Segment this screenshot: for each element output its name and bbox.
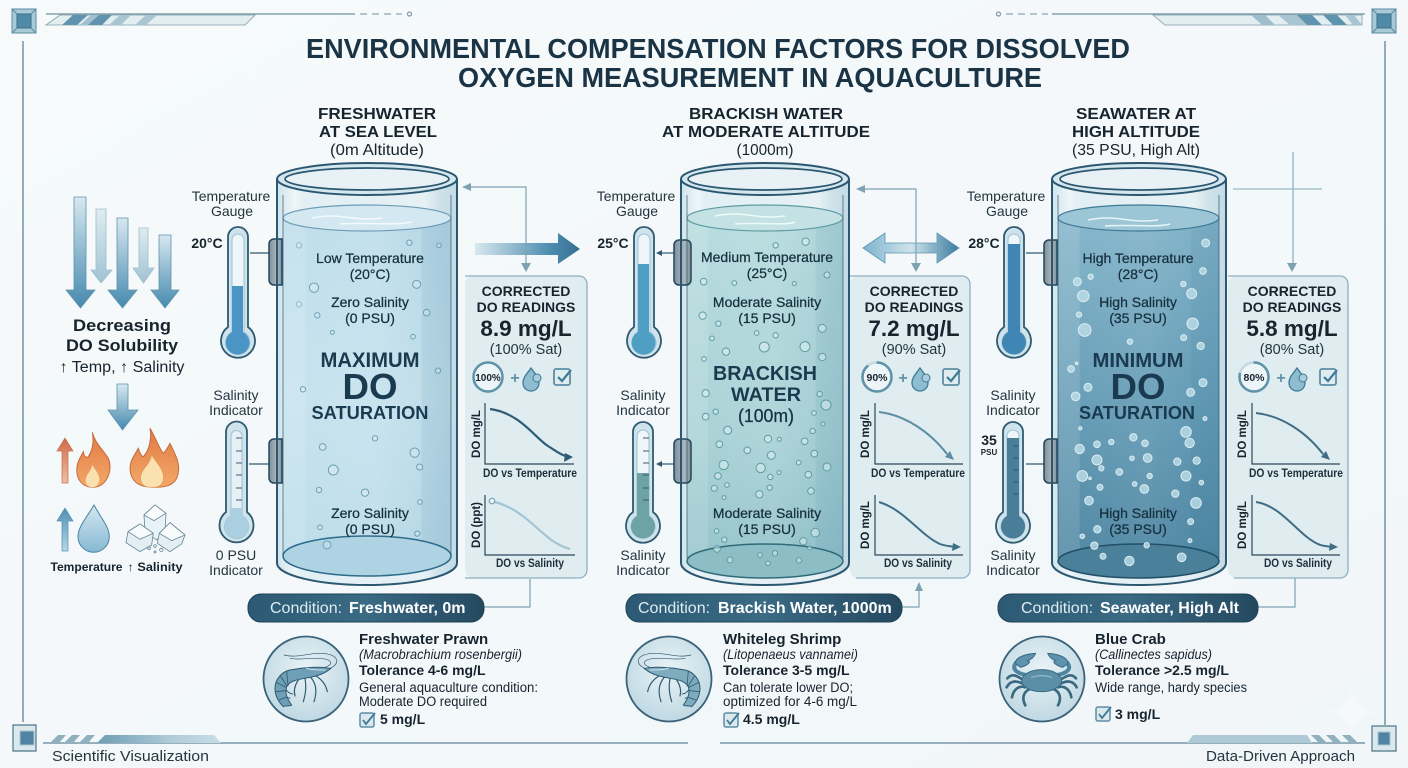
text: temperature and salinity labels: Temperature [50, 560, 123, 574]
heading: brackish column: (1000m) [736, 142, 794, 159]
tank text: (35 PSU) [1109, 521, 1167, 537]
value: 35 PSU: PSU [981, 448, 997, 457]
connector: pill 3 to panel 3 [1258, 578, 1295, 607]
heading: freshwater column: FRESHWATER [318, 106, 436, 123]
bubbles [296, 240, 441, 549]
text: decreasing DO solubility [60, 316, 185, 376]
species text: freshwater prawn: Tolerance 4-6 mg/L [359, 662, 486, 678]
icon: decreasing arrows [66, 197, 179, 308]
title [306, 33, 1130, 93]
chart: DO vs salinity: DO (ppt) [471, 502, 483, 548]
chart: DO vs salinity: DO vs Salinity [884, 558, 953, 570]
icon: saturation ring [474, 362, 502, 392]
icon: blue up arrow [57, 508, 73, 551]
value: 7.2 mg/L [868, 316, 960, 341]
connector: pill 1 to panel 1 [484, 579, 530, 607]
glass body [277, 179, 457, 585]
chart: DO vs salinity [860, 495, 963, 570]
plus sign: + [898, 370, 908, 387]
condition pill: freshwater: Freshwater, 0m [349, 600, 466, 617]
species text: whiteleg shrimp: Tolerance 3-5 mg/L [723, 662, 850, 678]
water column [283, 218, 451, 576]
panel: corrected readings 1 [465, 276, 587, 578]
value: 28°C: 28°C [968, 235, 1000, 251]
bubbles [1068, 239, 1210, 566]
value: 35 PSU: 35 [981, 432, 997, 448]
tank text: (15 PSU) [738, 310, 796, 326]
species text: blue crab: Blue Crab [1095, 631, 1166, 648]
value: 5.8 mg/L [1246, 316, 1338, 341]
connector: salinity clip [656, 461, 675, 467]
tank text [1079, 250, 1195, 537]
label: temperature gauge: Temperature [597, 188, 676, 204]
connector: temperature clip [250, 252, 270, 254]
water shading [687, 218, 843, 578]
species text: whiteleg shrimp: Whiteleg Shrimp [723, 631, 841, 648]
heading: DO READINGS [477, 299, 575, 315]
heading [865, 283, 963, 315]
tank text: SATURATION [1079, 403, 1195, 423]
column 3: seawater instruments [967, 188, 1046, 578]
species text: freshwater prawn: General aquaculture condition: [359, 680, 538, 695]
check: 5 mg/L: 5 mg/L [380, 711, 426, 727]
species icon: whiteleg shrimp [626, 636, 712, 722]
plus sign: + [510, 370, 520, 387]
label: salinity indicator: Indicator [616, 402, 670, 418]
clamps [1044, 240, 1057, 483]
label: salinity indicator lower [616, 547, 670, 578]
label: temperature gauge: Gauge [211, 203, 253, 219]
heading: brackish column [662, 106, 870, 159]
icon: drop [523, 368, 541, 391]
tank floor [283, 536, 451, 576]
icon: check box [554, 369, 571, 385]
chart: DO vs temperature [471, 403, 577, 480]
glass body [1052, 179, 1226, 585]
label: temperature gauge: Gauge [986, 203, 1028, 219]
label: temperature gauge [967, 188, 1046, 219]
icon: temperature thermometer [997, 227, 1031, 358]
left panel: decreasing DO solubility [50, 197, 185, 574]
chart: DO vs temperature: DO vs Temperature [1249, 468, 1343, 480]
heading: freshwater column [318, 106, 437, 159]
icon: salt cubes [126, 505, 185, 553]
label: temperature gauge [192, 188, 271, 219]
bottom-left band [50, 735, 221, 743]
connector: pill 2 to panel 2 [902, 582, 923, 607]
tank text: High Salinity [1099, 505, 1177, 521]
chart: DO vs temperature: DO mg/L [860, 410, 872, 458]
species text: whiteleg shrimp: (Litopenaeus vannamei) [723, 646, 858, 662]
tank text: DO [1110, 366, 1166, 407]
title: OXYGEN MEASUREMENT IN AQUACULTURE [458, 62, 1042, 93]
label: salinity indicator: Indicator [209, 402, 263, 418]
tank text: Zero Salinity [331, 294, 409, 310]
saturation: (80% Sat) [1260, 342, 1324, 358]
chart: DO vs salinity: DO vs Salinity [496, 558, 565, 570]
saturation: (90% Sat) [882, 342, 946, 358]
species icon: freshwater prawn [264, 636, 348, 722]
heading: seawater column: SEAWATER AT [1076, 106, 1196, 123]
water surface [687, 205, 843, 231]
tank text: MINIMUM [1092, 350, 1184, 372]
tank text: (0 PSU) [345, 521, 395, 537]
label: salinity indicator lower [986, 547, 1040, 578]
label: salinity indicator: Indicator [986, 402, 1040, 418]
check: 3 mg/L [1096, 706, 1161, 722]
label: salinity indicator: Salinity [213, 387, 259, 403]
column 1: freshwater instruments [191, 188, 271, 578]
species text: blue crab: Wide range, hardy species [1095, 680, 1247, 695]
heading: freshwater column: AT SEA LEVEL [319, 124, 437, 141]
tank: seawater [1044, 163, 1226, 585]
water shading [283, 218, 451, 576]
glass outline [681, 163, 849, 585]
connector: tank to readings 1 [462, 183, 531, 272]
icon: check box [1320, 369, 1337, 385]
heading: brackish column: BRACKISH WATER [689, 106, 843, 123]
tank text [312, 250, 428, 537]
top-left band [46, 15, 255, 25]
heading: seawater column: HIGH ALTITUDE [1072, 124, 1200, 141]
text: temperature and salinity labels [50, 560, 183, 574]
water column [687, 218, 843, 578]
label: salinity indicator [209, 387, 263, 418]
panel: corrected readings 3 [1228, 276, 1348, 578]
label: salinity indicator [986, 387, 1040, 418]
species text: blue crab [1095, 631, 1247, 722]
tank text: (35 PSU) [1109, 310, 1167, 326]
chart: DO vs temperature: DO vs Temperature [483, 468, 577, 480]
chart: DO vs temperature: DO mg/L [1237, 410, 1249, 458]
heading: seawater column: (35 PSU, High Alt) [1072, 142, 1200, 159]
heading [1243, 283, 1341, 315]
heading: DO READINGS [1243, 299, 1341, 315]
species text: freshwater prawn: Moderate DO required [359, 694, 487, 709]
condition pill: brackish [626, 594, 902, 622]
icon: temperature thermometer [627, 227, 661, 358]
chart: DO vs temperature [1237, 403, 1343, 480]
glass outline [1052, 163, 1226, 585]
water surface [1058, 205, 1219, 231]
heading: seawater column [1072, 106, 1200, 159]
label: salinity indicator lower: Salinity [990, 547, 1036, 563]
corner bottom-right [1372, 726, 1396, 751]
condition pill: freshwater: Condition: [270, 600, 342, 617]
tank text: Zero Salinity [331, 505, 409, 521]
chart: DO vs salinity: DO mg/L [1237, 501, 1249, 549]
connector: temperature clip [656, 250, 675, 256]
bottom-right band [1187, 735, 1358, 743]
saturation: (100% Sat) [490, 342, 562, 358]
icon: temperature thermometer [221, 227, 255, 358]
label: salinity indicator [616, 387, 670, 418]
tank text: (0 PSU) [345, 310, 395, 326]
icon: check box [943, 369, 960, 385]
connector: salinity clip [249, 463, 270, 465]
tank floor [687, 544, 843, 578]
label: salinity indicator: Salinity [620, 387, 666, 403]
label: salinity indicator lower: Indicator [986, 562, 1040, 578]
clamps [674, 240, 691, 483]
heading: DO READINGS [865, 299, 963, 315]
tank text [701, 249, 833, 537]
icon: salinity gauge [220, 422, 254, 542]
icon: red up arrow [57, 438, 73, 483]
chart: DO vs salinity: DO mg/L [860, 501, 872, 549]
condition pill: brackish: Brackish Water, 1000m [718, 600, 892, 617]
tank text: MAXIMUM [320, 349, 420, 372]
label: salinity indicator: Salinity [990, 387, 1036, 403]
heading [477, 283, 575, 315]
icon: saturation ring [1240, 362, 1268, 392]
species text: freshwater prawn [359, 631, 538, 727]
arrow: flow to panel 1 [475, 233, 580, 264]
condition pill: freshwater [248, 594, 484, 622]
species text: blue crab: (Callinectes sapidus) [1095, 646, 1212, 662]
check: 5 mg/L [360, 711, 426, 727]
connector: cross lines to readings 3 [1233, 152, 1322, 272]
heading: CORRECTED [1248, 283, 1336, 299]
tank text: Medium Temperature [701, 249, 833, 265]
condition pill: brackish: Condition: [638, 600, 710, 617]
text: decreasing DO solubility: ↑ Temp, ↑ Salinity [60, 359, 185, 376]
arrow: double-headed exchange [863, 233, 959, 263]
corner top-left [12, 9, 36, 33]
footer right: Data-Driven Approach [1206, 748, 1355, 765]
connector: tank to readings 2 [856, 185, 921, 272]
chart: DO vs temperature: DO mg/L [471, 410, 483, 458]
tank text: Low Temperature [316, 250, 424, 266]
label: salinity indicator lower: Indicator [616, 562, 670, 578]
label: 0 PSU indicator: 0 PSU [216, 547, 256, 563]
heading: CORRECTED [870, 283, 958, 299]
tank text: (100m) [738, 406, 794, 426]
title: ENVIRONMENTAL COMPENSATION FACTORS FOR DISSOLVED [306, 33, 1130, 64]
species text: whiteleg shrimp [723, 631, 858, 727]
value: 20°C: 20°C [191, 235, 223, 251]
glass outline [277, 163, 457, 585]
tank text: (20°C) [350, 266, 390, 282]
sparkle [1328, 688, 1376, 736]
tank text: WATER [731, 384, 801, 406]
value: 35 PSU [981, 432, 997, 457]
corner top-right [1372, 9, 1396, 33]
icon: drop [1289, 368, 1307, 391]
label: salinity indicator lower: Salinity [620, 547, 666, 563]
icon: salinity gauge [996, 422, 1030, 543]
footer left: Scientific Visualization [52, 748, 209, 765]
label: temperature gauge [597, 188, 676, 219]
species text: whiteleg shrimp: Can tolerate lower DO; [723, 680, 853, 695]
tank text: SATURATION [312, 403, 428, 423]
chart: DO vs temperature [860, 403, 965, 480]
species text: freshwater prawn: Freshwater Prawn [359, 631, 488, 648]
check: 4.5 mg/L: 4.5 mg/L [743, 711, 800, 727]
arrow: down to factors [108, 384, 138, 430]
corner bottom-left [13, 725, 36, 751]
tank text: BRACKISH [713, 362, 817, 385]
plus sign: + [1276, 370, 1286, 387]
label: 0 PSU indicator [209, 547, 263, 578]
tank floor [1058, 544, 1219, 578]
tank text: (15 PSU) [738, 521, 796, 537]
chart: DO vs temperature: DO vs Temperature [871, 468, 965, 480]
tank text: Moderate Salinity [713, 505, 821, 521]
chart: DO vs salinity [471, 495, 575, 570]
check: 3 mg/L: 3 mg/L [1115, 706, 1161, 722]
connector: temperature clip [1026, 252, 1044, 254]
tank: freshwater [269, 163, 457, 585]
label: temperature gauge: Gauge [616, 203, 658, 219]
heading: freshwater column: (0m Altitude) [330, 142, 424, 159]
water column [1058, 218, 1219, 578]
connector: salinity clip [1026, 463, 1044, 465]
chart: DO vs salinity [1237, 495, 1340, 570]
icon: drop [912, 368, 930, 391]
panel: corrected readings 2 [850, 276, 970, 578]
text: decreasing DO solubility: Decreasing [73, 316, 171, 335]
icon: saturation ring: 90% [866, 372, 888, 384]
species text: blue crab: Tolerance >2.5 mg/L [1095, 662, 1229, 678]
heading: CORRECTED [482, 283, 570, 299]
tank text: (25°C) [747, 265, 787, 281]
icon: saturation ring: 80% [1243, 372, 1265, 384]
label: temperature gauge: Temperature [967, 188, 1046, 204]
icon: saturation ring [862, 362, 892, 392]
column 2: brackish instruments [597, 188, 676, 578]
top-right band [1153, 15, 1362, 25]
heading: brackish column: AT MODERATE ALTITUDE [662, 124, 870, 141]
tank text: Moderate Salinity [713, 294, 821, 310]
text: temperature and salinity labels: ↑ Salinity [128, 560, 183, 574]
species text: freshwater prawn: (Macrobrachium rosenbergii) [359, 646, 522, 662]
tank text: High Salinity [1099, 294, 1177, 310]
tank text: (28°C) [1118, 266, 1158, 282]
condition pill: seawater: Seawater, High Alt [1100, 600, 1240, 617]
icon: water drop [78, 505, 109, 552]
glass body [681, 179, 849, 585]
tank text: High Temperature [1082, 250, 1194, 266]
icon: salinity gauge [626, 422, 660, 543]
label: temperature gauge: Temperature [192, 188, 271, 204]
condition pill: seawater: Condition: [1021, 600, 1093, 617]
tank: brackish [674, 163, 849, 585]
species icon: blue crab [1000, 636, 1084, 722]
clamps [269, 239, 282, 483]
species text: whiteleg shrimp: optimized for 4-6 mg/L [723, 694, 857, 709]
text: decreasing DO solubility: DO Solubility [66, 336, 179, 355]
value: 25°C: 25°C [597, 235, 629, 251]
condition pill: seawater [998, 594, 1258, 622]
bubbles [699, 238, 831, 566]
tank text: DO [342, 366, 398, 407]
water shading [1058, 218, 1219, 578]
value: 8.9 mg/L [480, 316, 572, 341]
icon: saturation ring: 100% [475, 373, 501, 384]
label: 0 PSU indicator: Indicator [209, 562, 263, 578]
chart: DO vs salinity: DO vs Salinity [1264, 558, 1333, 570]
icon: flames [77, 428, 179, 487]
water surface [283, 205, 451, 231]
